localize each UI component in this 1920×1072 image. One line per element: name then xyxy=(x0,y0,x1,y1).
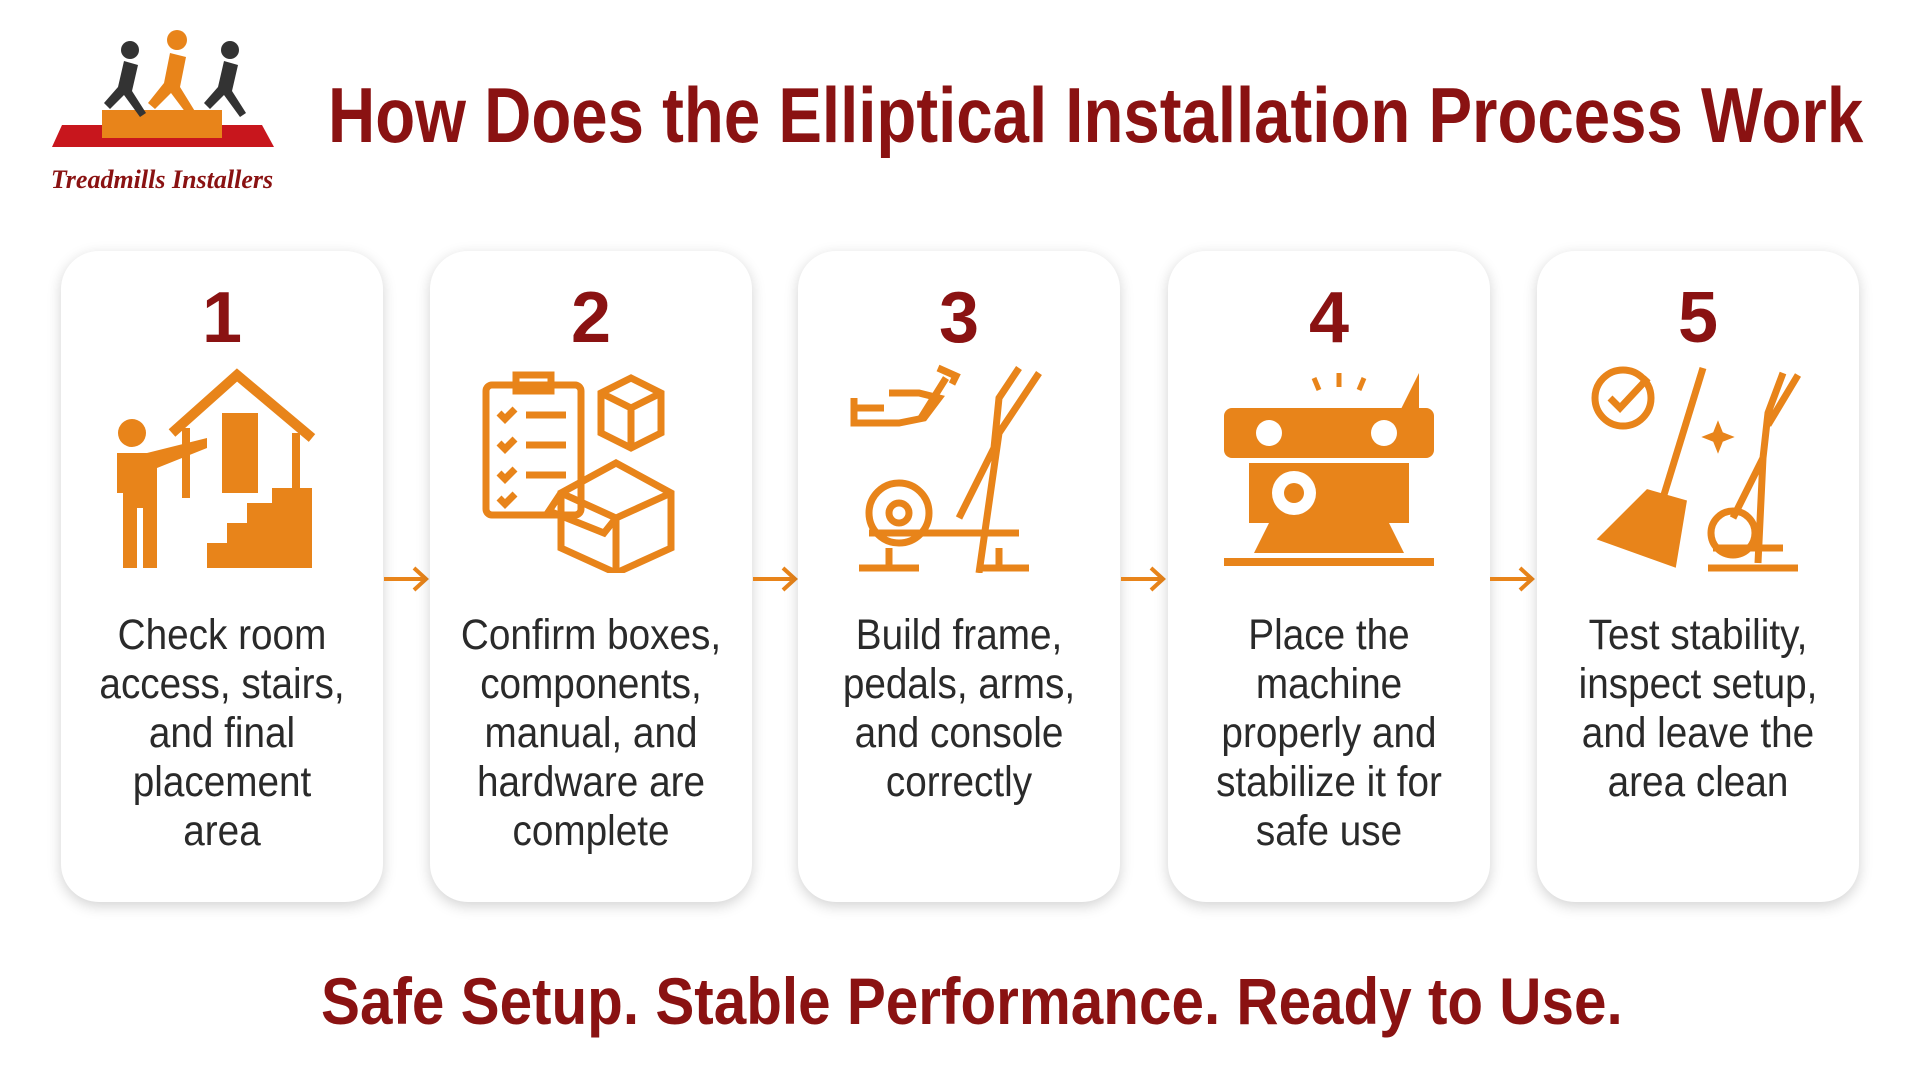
text xyxy=(1216,611,1442,855)
card 1: 1 xyxy=(202,278,242,358)
text: Test stability, xyxy=(1589,611,1807,659)
text: Confirm boxes, xyxy=(461,611,721,659)
logo xyxy=(51,30,274,194)
card 2: 2 xyxy=(571,278,611,358)
arrow xyxy=(384,566,429,592)
arrow xyxy=(1121,566,1166,592)
icon: level on machine xyxy=(1224,373,1434,566)
text xyxy=(461,611,721,855)
text: Build frame, xyxy=(856,611,1062,659)
icon: check, broom, elliptical xyxy=(1592,366,1801,572)
text: manual, and xyxy=(484,709,697,757)
icon: wrench and elliptical xyxy=(850,364,1042,573)
text: area clean xyxy=(1608,758,1788,806)
text: placement xyxy=(133,758,311,806)
text: Check room xyxy=(118,611,326,659)
arrow xyxy=(1490,566,1535,592)
card 2 xyxy=(430,251,752,902)
text xyxy=(843,611,1075,806)
card 4 xyxy=(1168,251,1490,902)
text: Place the xyxy=(1248,611,1410,659)
text: components, xyxy=(480,660,702,708)
footer tagline: Safe Setup. Stable Performance. Ready to Use. xyxy=(321,964,1623,1038)
text: pedals, arms, xyxy=(843,660,1075,708)
text: and final xyxy=(149,709,295,757)
card 1 xyxy=(61,251,383,902)
text: access, stairs, xyxy=(99,660,345,708)
text: stabilize it for xyxy=(1216,758,1442,806)
card 4: 4 xyxy=(1309,278,1349,358)
icon: person and house xyxy=(117,368,316,568)
text: and leave the xyxy=(1582,709,1814,757)
text: correctly xyxy=(886,758,1032,806)
text: complete xyxy=(512,807,670,855)
text: area xyxy=(183,807,261,855)
text: machine xyxy=(1256,660,1402,708)
card 5: 5 xyxy=(1678,278,1718,358)
text: and console xyxy=(855,709,1063,757)
text: inspect setup, xyxy=(1579,660,1817,708)
text xyxy=(99,611,345,855)
title: How Does the Elliptical Installation Process Work xyxy=(328,71,1863,159)
text: safe use xyxy=(1256,807,1402,855)
icon: checklist and boxes xyxy=(482,372,674,573)
card 3 xyxy=(798,251,1120,902)
text xyxy=(1579,611,1817,806)
logo: Treadmills Installers xyxy=(51,165,273,194)
card 5 xyxy=(1537,251,1859,902)
arrow xyxy=(753,566,798,592)
card 3: 3 xyxy=(939,278,979,358)
text: hardware are xyxy=(477,758,705,806)
text: properly and xyxy=(1221,709,1437,757)
